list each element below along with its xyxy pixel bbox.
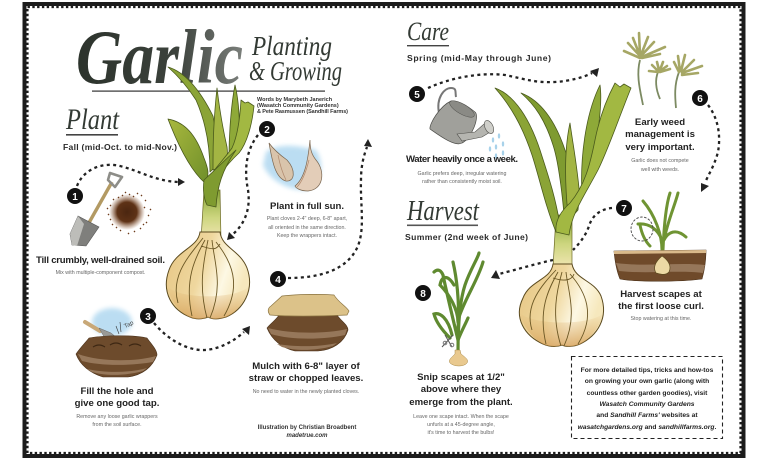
right garlic plant bbox=[495, 83, 631, 346]
arrow 5 bbox=[428, 68, 599, 88]
title: Planting & Growing: & Growing bbox=[249, 56, 342, 86]
text: step 3: Remove any loose garlic wrappers bbox=[76, 414, 158, 420]
title: Garlic: Garlic bbox=[76, 14, 243, 100]
badge 8 bbox=[415, 285, 431, 301]
badge 6 bbox=[692, 90, 708, 106]
bulb bbox=[166, 232, 250, 319]
text: step 7: Stop watering at this time. bbox=[631, 316, 691, 322]
badge 7 bbox=[616, 200, 632, 216]
heading: Harvest: Harvest bbox=[406, 196, 480, 227]
arrow 4 bbox=[288, 139, 372, 278]
illustration credit: Illustration by Christian Broadbent bbox=[258, 425, 356, 431]
text: step 2 bbox=[267, 201, 347, 239]
neck bbox=[553, 215, 572, 268]
icon: mulched soil bbox=[267, 294, 349, 351]
bulb bbox=[519, 264, 604, 346]
heading: Care: Care bbox=[407, 17, 449, 46]
text: step 5: rather than consistently moist soil. bbox=[422, 179, 502, 185]
illustration credit: madetrue.com bbox=[286, 433, 328, 439]
badge 2 bbox=[259, 121, 275, 137]
text: step 3: give one good tap. bbox=[75, 398, 159, 409]
text: step 8: above where they bbox=[421, 384, 502, 395]
text: step 2: Plant in full sun. bbox=[270, 201, 344, 212]
badge 3 bbox=[140, 308, 156, 324]
text: step 6: Garlic does not compete bbox=[631, 158, 689, 164]
text: step 7: the first loose curl. bbox=[618, 301, 704, 312]
text: step 8: Snip scapes at 1/2" bbox=[417, 372, 505, 383]
icon: water drops bbox=[489, 133, 504, 159]
subheading: Summer: Summer (2nd week of June) bbox=[405, 232, 528, 242]
badge 1: 1 bbox=[72, 192, 78, 203]
icon: weeds bbox=[624, 33, 702, 108]
icon: soil with trowel: Tap bbox=[123, 320, 135, 330]
left garlic plant bbox=[166, 67, 254, 319]
title rule bbox=[92, 90, 325, 92]
text: step 3: Fill the hole and bbox=[80, 386, 154, 397]
leaves bbox=[495, 83, 631, 235]
text: step 8: Leave one scape intact. When the scape bbox=[413, 414, 509, 420]
icon: garlic cloves bbox=[263, 140, 322, 191]
badge 3: 3 bbox=[145, 312, 151, 323]
illustration credit bbox=[258, 425, 356, 439]
badge 5 bbox=[409, 86, 425, 102]
badge 7: 7 bbox=[621, 204, 627, 215]
credits: (Wasatch Community Gardens) bbox=[257, 103, 339, 109]
icon: soil pile bbox=[107, 192, 151, 234]
subheading: Fall: Fall (mid-Oct. to mid-Nov.) bbox=[63, 142, 177, 152]
icon: watering can bbox=[430, 88, 496, 144]
credits bbox=[257, 97, 348, 115]
icon: garlic plant with scissors bbox=[434, 253, 483, 366]
text: step 5: Water heavily once a week. bbox=[406, 154, 518, 165]
text: step 5: Garlic prefers deep, irregular watering bbox=[418, 171, 507, 177]
callout: more information box: countless other garden goodies), visit bbox=[587, 390, 708, 397]
badge 4: 4 bbox=[275, 275, 281, 286]
arrow 2 bbox=[227, 135, 258, 240]
heading: Plant: Plant bbox=[65, 103, 120, 136]
text: step 6: management is bbox=[625, 129, 695, 140]
text: step 6: well with weeds. bbox=[641, 167, 679, 173]
text: step 8: unfurls at a 45-degree angle, bbox=[427, 422, 495, 428]
arrow 1 bbox=[77, 165, 185, 186]
text: step 7: Harvest scapes at bbox=[620, 289, 703, 300]
text: step 6: very important. bbox=[625, 142, 695, 153]
callout: more information box: Wasatch Community Gardens bbox=[599, 401, 695, 408]
badge 4 bbox=[270, 271, 286, 287]
icon: soil with trowel bbox=[76, 308, 157, 377]
credits: Words by Marybeth Janerich bbox=[257, 97, 333, 103]
text: step 3 bbox=[75, 386, 159, 428]
badge 8: 8 bbox=[420, 289, 426, 300]
credits: & Pete Rasmussen (Sandhill Farms) bbox=[257, 109, 348, 115]
text: step 2: Plant cloves 2-4" deep, 6-8" apart, bbox=[267, 216, 347, 222]
text: step 2: all oriented in the same direction. bbox=[268, 225, 346, 231]
text: step 4: straw or chopped leaves. bbox=[249, 373, 363, 384]
leaves bbox=[168, 67, 254, 207]
title: Planting & Growing: Planting bbox=[251, 31, 332, 61]
title: Planting & Growing bbox=[249, 31, 342, 86]
callout: more information box: For more detailed tips, tricks and how-tos bbox=[581, 367, 714, 374]
badge 6: 6 bbox=[697, 94, 703, 105]
text: step 8: it's time to harvest the bulbs! bbox=[428, 430, 494, 436]
text: step 5 bbox=[406, 154, 518, 185]
text: step 6: Early weed bbox=[635, 117, 685, 128]
text: step 4: No need to water in the newly planted cloves. bbox=[253, 389, 359, 395]
callout: more information box: and Sandhill Farms' websites at bbox=[596, 412, 698, 419]
text: step 4 bbox=[249, 361, 363, 395]
icon: sprouting garlic in soil bbox=[614, 193, 706, 281]
text: step 1: Mix with multiple-component compost. bbox=[56, 270, 145, 276]
text: step 7 bbox=[618, 289, 704, 322]
arrow 7 to 8 bbox=[491, 208, 612, 279]
badge 5: 5 bbox=[414, 90, 420, 101]
arrow 6 bbox=[701, 105, 719, 192]
badge 1 bbox=[67, 188, 83, 204]
callout: more information box: wasatchgardens.org and sandhillfarms.org. bbox=[578, 424, 716, 431]
text: step 4: Mulch with 6-8" layer of bbox=[252, 361, 361, 372]
text: step 1: Till crumbly, well-drained soil. bbox=[36, 255, 165, 266]
callout: more information box bbox=[572, 356, 722, 438]
text: step 3: from the soil surface. bbox=[92, 422, 142, 428]
text: step 2: Keep the wrappers intact. bbox=[277, 233, 337, 239]
neck bbox=[201, 190, 221, 240]
icon: shovel bbox=[70, 173, 122, 246]
badge 2: 2 bbox=[264, 125, 270, 136]
arrow 3 bbox=[154, 323, 250, 350]
callout: more information box: on growing your own garlic (along with bbox=[585, 378, 709, 385]
text: step 1 bbox=[36, 255, 165, 276]
text: step 6 bbox=[625, 117, 695, 173]
subheading: Spring: Spring (mid-May through June) bbox=[407, 53, 551, 63]
text: step 8 bbox=[409, 372, 513, 436]
text: step 8: emerge from the plant. bbox=[409, 397, 513, 408]
